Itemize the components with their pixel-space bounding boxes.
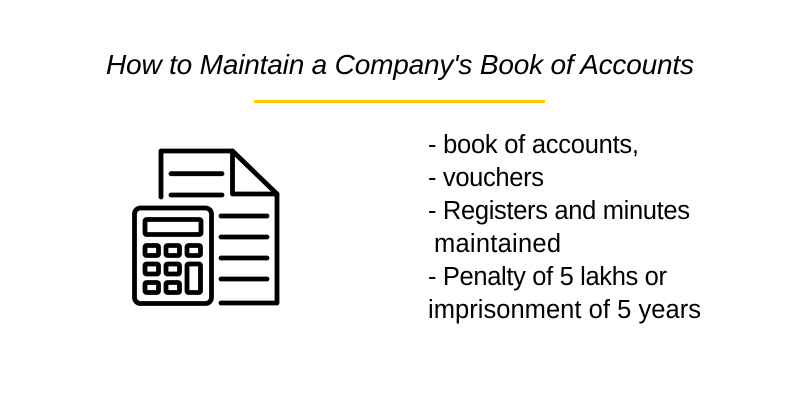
yellow title underline <box>254 100 545 103</box>
bullet list text: maintained <box>434 230 561 258</box>
bullet list text: imprisonment of 5 years <box>428 296 701 324</box>
icon: document with calculator <box>134 151 277 304</box>
bullet list text: - vouchers <box>428 164 544 192</box>
bullet list text: - Registers and minutes <box>428 197 690 225</box>
icon part: document text lines <box>171 174 267 279</box>
title: How to Maintain a Company's Book of Accounts <box>106 49 694 80</box>
bullet list text: - book of accounts, <box>428 131 639 159</box>
icon part: document sheet <box>161 151 277 303</box>
bullet list text <box>428 131 701 324</box>
icon part: calculator <box>134 208 212 304</box>
bullet list text: - Penalty of 5 lakhs or <box>428 263 668 291</box>
